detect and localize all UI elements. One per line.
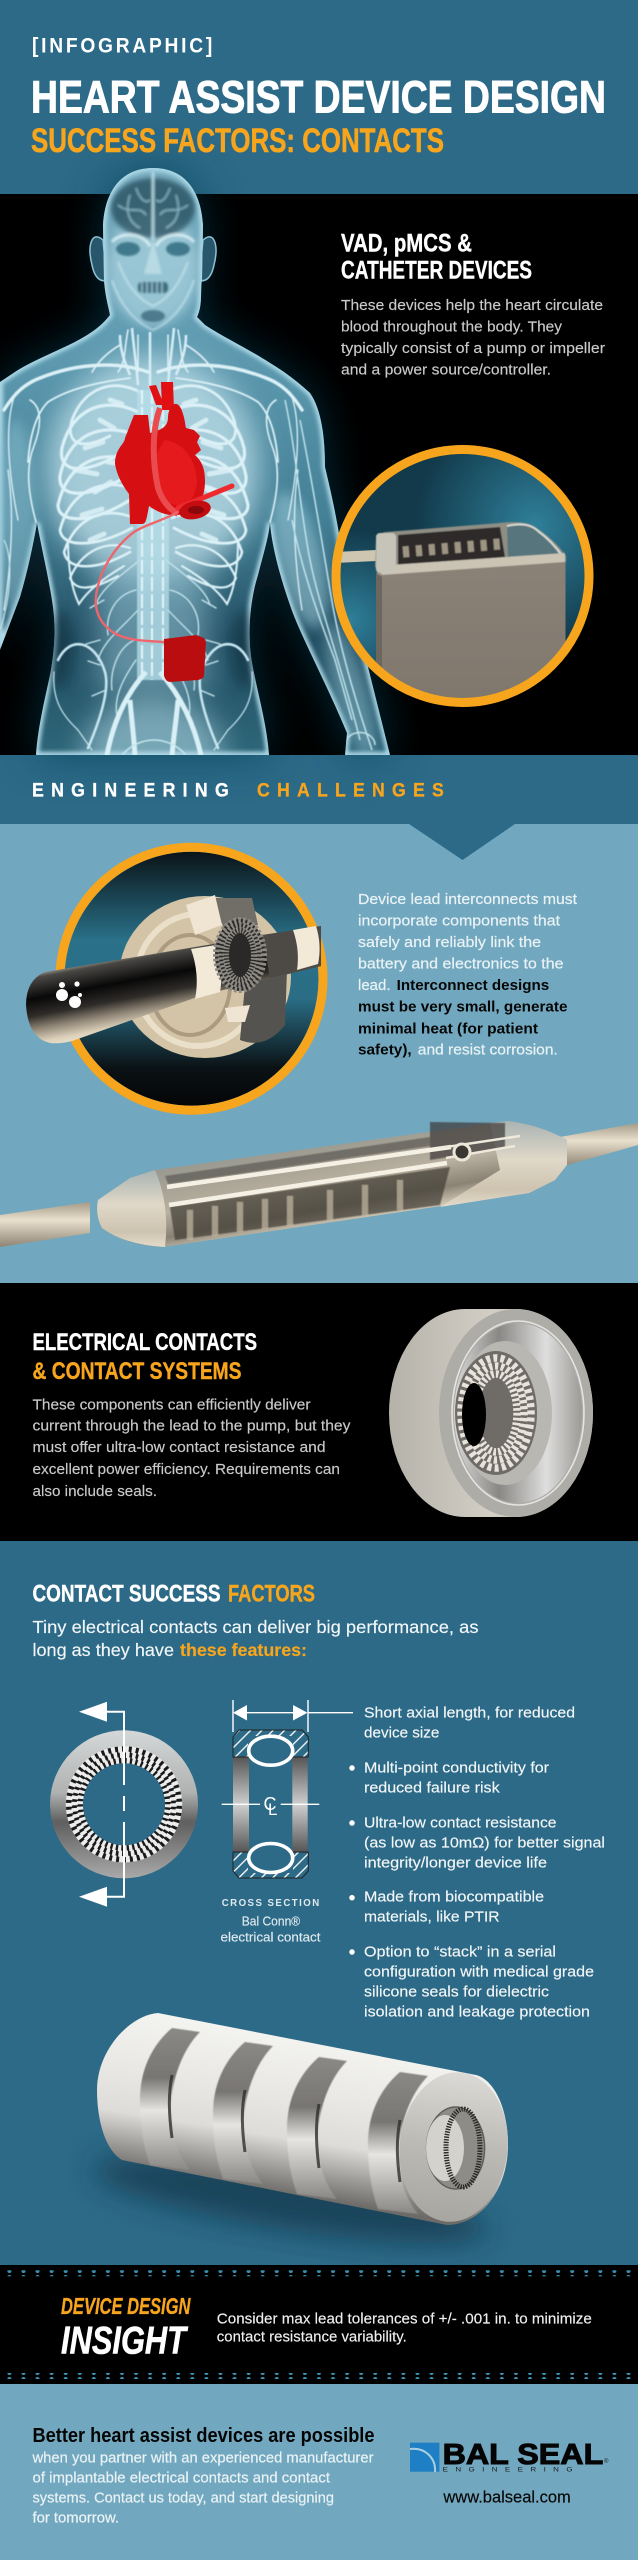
- banner heading: ENGINEERING: [32, 780, 236, 802]
- description: current through the lead to the pump, but they: [32, 1419, 351, 1435]
- bottom coil section: [248, 1844, 293, 1873]
- gray contact walls: [233, 1757, 249, 1852]
- magnified pump connector: orange circle callout: [335, 449, 590, 710]
- text block: electrical contacts and contact systems: [32, 1329, 351, 1500]
- diagram: contact cross section: [222, 1700, 353, 1878]
- hatched blocks: [233, 1730, 308, 1757]
- feature: short axial length: Short axial length, for reduced: [364, 1706, 575, 1722]
- feature: ultra-low contact resistance: Ultra-low contact resistance: [364, 1816, 556, 1832]
- footer call to action: for tomorrow.: [32, 2511, 119, 2527]
- seal grooves: [169, 2075, 400, 2182]
- abdominal vessels right: [166, 560, 252, 750]
- heading: ELECTRICAL CONTACTS: [32, 1329, 257, 1356]
- caption: cross section: electrical contact: [220, 1930, 321, 1945]
- insight text: contact resistance variability.: [217, 2329, 407, 2346]
- banner pointer: [409, 824, 515, 860]
- feature: multi-point conductivity: [349, 1761, 549, 1797]
- text block: VAD, pMCS and catheter devices: [341, 230, 605, 378]
- text block: device lead interconnects: battery and electronics to the: [358, 956, 564, 972]
- feature: stackable configuration: Option to “stack” in a serial: [364, 1945, 556, 1961]
- feature: multi-point conductivity: reduced failure risk: [364, 1781, 500, 1797]
- footer call to action: when you partner with an experienced manufacturer: [31, 2451, 374, 2467]
- metal probe: [26, 926, 321, 1043]
- diagram: contact face view with section arrows: [50, 1702, 198, 1907]
- intro paragraph: [32, 1617, 479, 1660]
- footer call to action: [31, 2425, 375, 2527]
- lead wire: [341, 550, 376, 563]
- eyebrow label: [INFOGRAPHIC]: [32, 34, 215, 58]
- title block: [31, 34, 606, 160]
- text block: device lead interconnects: [358, 892, 577, 1059]
- dotted border bottom: [0, 2373, 638, 2379]
- logo: Bal Seal Engineering: ®: [604, 2458, 609, 2465]
- footer call to action: of implantable electrical contacts and contact: [32, 2471, 330, 2487]
- caption: cross section: [220, 1897, 321, 1945]
- feature: ultra-low contact resistance: integrity/longer device life: [364, 1856, 547, 1872]
- caption: cross section: Bal Conn®: [242, 1914, 301, 1929]
- head: brain, skull and face: [111, 172, 195, 330]
- description: also include seals.: [32, 1484, 157, 1500]
- feature: ultra-low contact resistance: [349, 1816, 605, 1872]
- text block: device lead interconnects: incorporate components that: [358, 914, 560, 930]
- banner heading: CHALLENGES: [257, 780, 451, 802]
- feature: biocompatible materials: Made from biocompatible: [364, 1890, 544, 1906]
- dotted border top: [0, 2270, 638, 2276]
- dark internal contacts: [165, 1122, 505, 1240]
- feature: short axial length: [364, 1706, 575, 1742]
- description: [32, 1397, 351, 1500]
- feature: stackable configuration: [349, 1945, 594, 2021]
- magnified lead interconnect: orange circle: [26, 847, 323, 1110]
- photo: single electrical contact ring: [389, 1309, 593, 1517]
- insight label: INSIGHT: [61, 2319, 189, 2362]
- banner heading: [32, 780, 451, 802]
- feature list: [349, 1706, 605, 2021]
- illustration: x-ray human body with heart pump: [0, 168, 390, 815]
- cast shadow: [88, 2139, 492, 2261]
- bold emphasis: minimal heat (for patient: [358, 1021, 538, 1037]
- description: excellent power efficiency. Requirements can: [32, 1462, 340, 1478]
- spine: [137, 390, 169, 680]
- driveline cable: [96, 512, 178, 642]
- centerline symbol: C: [264, 1794, 276, 1814]
- logo: Bal Seal Engineering: BAL SEAL: [443, 2439, 603, 2471]
- description: These components can efficiently deliver: [32, 1397, 311, 1413]
- intro paragraph: Tiny electrical contacts can deliver big performance, as: [32, 1617, 479, 1637]
- feature: biocompatible materials: materials, like PTIR: [364, 1910, 500, 1926]
- heading: [32, 1329, 257, 1385]
- text block: device lead interconnects: lead.: [358, 978, 390, 994]
- beige connector housing: [119, 895, 291, 1058]
- section: contact success factors heading: FACTORS: [228, 1581, 315, 1608]
- description: and a power source/controller.: [341, 362, 551, 378]
- centerline symbol: L: [268, 1800, 277, 1819]
- text block: device lead interconnects: safely and reliably link the: [358, 935, 541, 951]
- callout: device design insight: [0, 2270, 638, 2379]
- femoral arteries: [106, 672, 202, 760]
- white conductor rails: [167, 1147, 451, 1205]
- heading: VAD, pMCS &: [341, 230, 472, 258]
- feature: ultra-low contact resistance: (as low as 10mΩ) for better signal: [364, 1836, 605, 1852]
- website: www.balseal.com: [442, 2488, 571, 2507]
- feature: multi-point conductivity: Multi-point conductivity for: [364, 1761, 549, 1777]
- description: These devices help the heart circulate: [341, 298, 603, 314]
- rib cage left: [4, 330, 148, 610]
- text block: device lead interconnects: Device lead interconnects must: [358, 892, 577, 908]
- insight text: [217, 2310, 592, 2346]
- heading: & CONTACT SYSTEMS: [32, 1358, 242, 1385]
- bold emphasis: must be very small, generate: [358, 1000, 568, 1016]
- clear left end cap: [97, 1170, 166, 1247]
- description: typically consist of a pump or impeller: [341, 341, 605, 357]
- intro paragraph: these features:: [180, 1640, 307, 1660]
- heart with pump: [115, 382, 232, 524]
- clear header with contact stack: [375, 522, 566, 575]
- intro paragraph: long as they have: [32, 1640, 174, 1660]
- banner: engineering challenges: [32, 780, 515, 860]
- bold emphasis: [358, 978, 568, 1059]
- feature: biocompatible materials: [349, 1890, 544, 1926]
- description: must offer ultra-low contact resistance and: [32, 1440, 326, 1456]
- feature: stackable configuration: isolation and leakage protection: [364, 2005, 590, 2021]
- insight label: [61, 2293, 191, 2362]
- rib cage right: [158, 330, 302, 610]
- end face: [392, 2067, 515, 2227]
- footer call to action: Better heart assist devices are possible: [32, 2425, 374, 2447]
- arm vessels: [285, 400, 375, 750]
- insight text: Consider max lead tolerances of +/- .001 in. to minimize: [217, 2310, 592, 2327]
- metal contact bands: [140, 2028, 428, 2214]
- logo: Bal Seal Engineering: ENGINEERING: [443, 2466, 580, 2474]
- device case: [376, 560, 566, 710]
- photo: stacked contact assembly: [88, 2013, 515, 2261]
- top coil section: [248, 1736, 293, 1765]
- logo mark: [410, 2443, 439, 2472]
- heading: CATHETER DEVICES: [341, 257, 532, 285]
- section: contact success factors heading: [32, 1581, 479, 1660]
- subtitle: SUCCESS FACTORS: CONTACTS: [31, 122, 444, 160]
- clear right end cap: [440, 1121, 567, 1207]
- caption: cross section: CROSS SECTION: [222, 1897, 321, 1909]
- feature: stackable configuration: configuration with medical grade: [364, 1965, 594, 1981]
- text block: device lead interconnects: and resist corrosion.: [418, 1043, 558, 1059]
- ears: [90, 237, 216, 281]
- bold emphasis: Interconnect designs: [397, 978, 549, 994]
- footer call to action: systems. Contact us today, and start designing: [32, 2491, 334, 2507]
- description: [341, 298, 605, 378]
- abdominal vessels left: [54, 560, 140, 750]
- section line and arrows: [79, 1702, 124, 1907]
- illustration: lead interconnect capsule: [0, 1121, 638, 1247]
- feature: short axial length: device size: [364, 1726, 439, 1742]
- logo: Bal Seal Engineering: [410, 2439, 609, 2507]
- section: contact success factors heading: CONTACT SUCCESS: [32, 1581, 220, 1608]
- red controller box: [164, 635, 206, 682]
- description: blood throughout the body. They: [341, 320, 563, 336]
- feature: stackable configuration: silicone seals for dielectric: [364, 1985, 549, 2001]
- heading: [341, 230, 532, 285]
- axial length dimension: [222, 1700, 353, 1804]
- bold emphasis: safety),: [358, 1043, 412, 1059]
- spring coil: [215, 919, 265, 991]
- neck vessels: [120, 328, 186, 388]
- insight label: DEVICE DESIGN: [61, 2293, 191, 2319]
